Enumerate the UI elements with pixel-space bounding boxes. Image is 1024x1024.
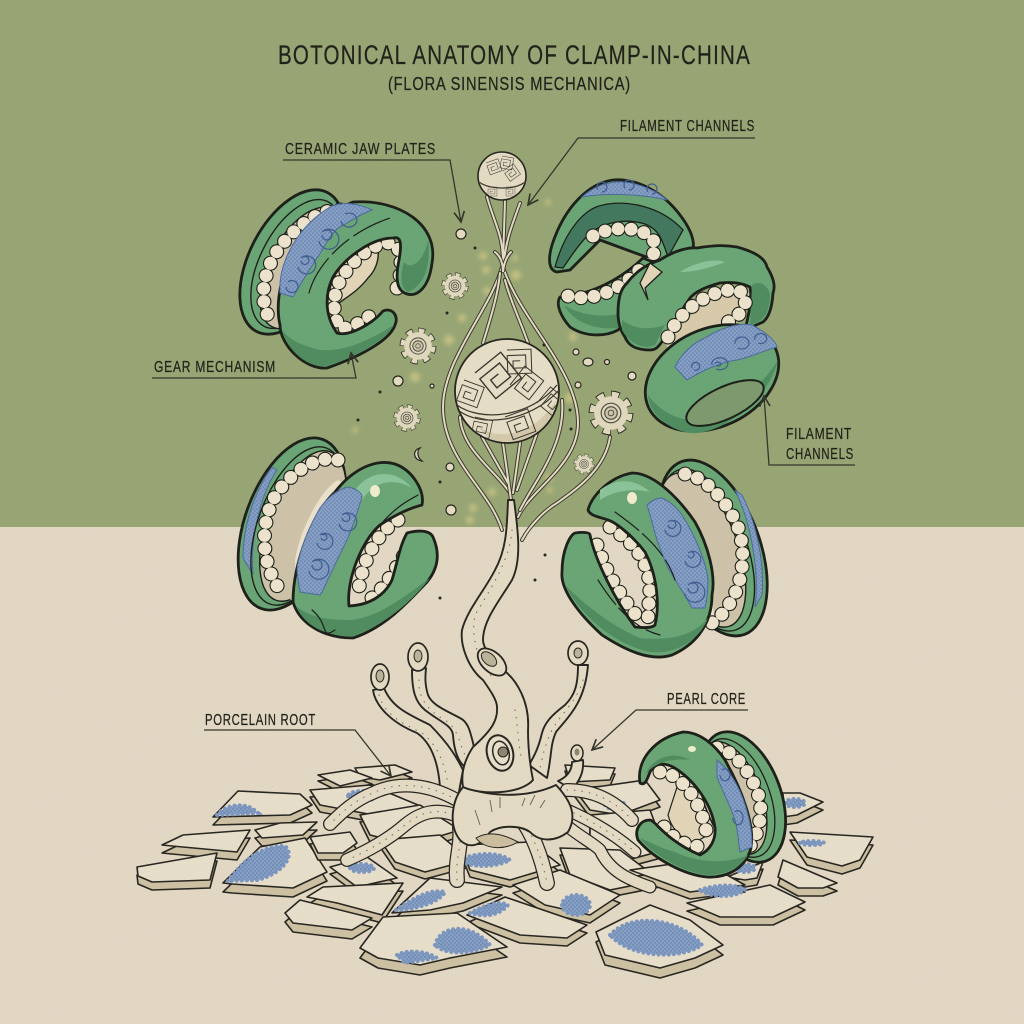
stem and head [462, 500, 533, 792]
label: gear mechanism: GEAR MECHANISM [154, 359, 276, 376]
label: ceramic jaw plates: CERAMIC JAW PLATES [285, 141, 436, 158]
label: porcelain root [204, 712, 391, 776]
icon: gears [396, 275, 628, 472]
clamp: lower-right jaw on shards [637, 720, 802, 877]
body [453, 785, 572, 845]
title: BOTONICAL ANATOMY OF CLAMP-IN-CHINA [278, 40, 751, 70]
label: filament channels top: FILAMENT CHANNELS [620, 118, 755, 135]
label: gear mechanism [152, 353, 356, 378]
clamp: middle-left jaw [217, 423, 437, 638]
label: filament channels right: CHANNELS [786, 446, 854, 463]
central eye [483, 732, 517, 774]
filaments and stem tree [443, 197, 610, 540]
upper tentacles [371, 641, 588, 797]
label: ceramic jaw plates [283, 141, 461, 222]
clamp: upper-right middle jaw [618, 246, 774, 357]
eye on stem [473, 643, 511, 681]
subtitle: (FLORA SINENSIS MECHANICA) [388, 74, 631, 94]
panel: parchment lower background [0, 527, 1024, 1024]
root tentacles [330, 786, 650, 887]
label: pearl core [592, 691, 748, 750]
label: filament channels right: FILAMENT [786, 426, 852, 443]
panel: sage upper background [0, 0, 1024, 527]
clamp: top-left jaw [218, 173, 433, 368]
clamp: right ring jaw [628, 304, 796, 452]
label: filament channels top [528, 118, 755, 205]
broken porcelain shards [137, 765, 873, 978]
label: filament channels right [764, 396, 855, 465]
label: pearl core: PEARL CORE [667, 691, 746, 708]
clamp: top-right arched jaw [550, 180, 693, 335]
icon: large patterned pearl core [455, 339, 567, 443]
icon: small upper pearl [478, 152, 526, 200]
porcelain root creature [330, 500, 650, 887]
small floating parts [356, 229, 636, 600]
glowing spores [352, 199, 577, 524]
label: porcelain root: PORCELAIN ROOT [205, 712, 316, 729]
clamp: middle-right jaw [562, 445, 789, 657]
